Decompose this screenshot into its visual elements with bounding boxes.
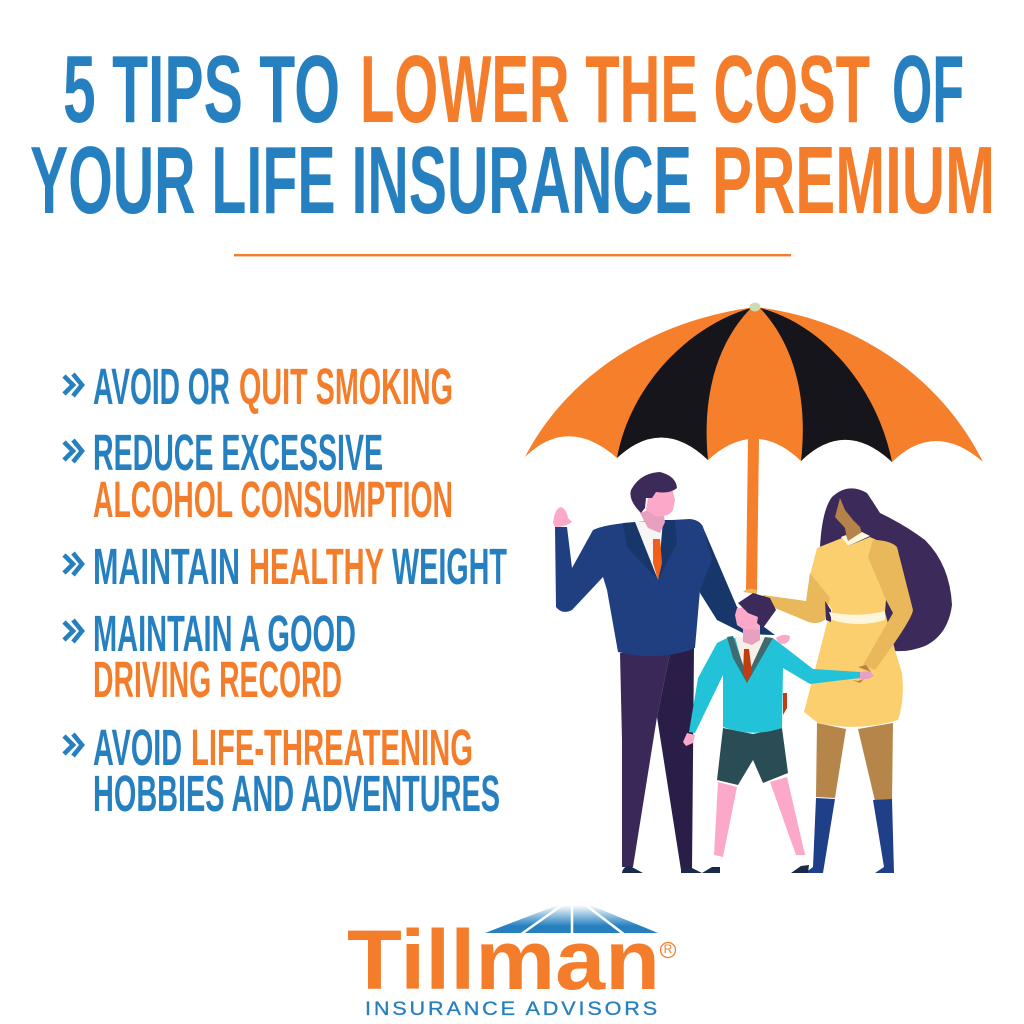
illustration: family under umbrella (525, 302, 983, 873)
man (553, 472, 775, 873)
tip 1 (64, 358, 453, 415)
tip 5 (64, 719, 500, 822)
title (30, 36, 995, 234)
tip 4: MAINTAIN A GOOD (93, 605, 356, 662)
logo roof (485, 905, 658, 933)
registered mark: R (664, 942, 673, 956)
logo wordmark: Tillman (347, 913, 660, 1007)
tips list (64, 358, 507, 822)
tip 1: QUIT SMOKING (239, 358, 453, 415)
woman (743, 488, 952, 873)
title: OF (892, 36, 964, 143)
child (683, 593, 874, 873)
tip 3 (64, 538, 507, 595)
logo (347, 903, 676, 1020)
tip 2 (64, 424, 453, 528)
tip 5: HOBBIES AND ADVENTURES (93, 765, 500, 822)
title: 5 TIPS TO (63, 36, 340, 143)
tip 4 (64, 605, 356, 708)
umbrella (525, 302, 983, 590)
logo tagline: INSURANCE ADVISORS (365, 999, 660, 1020)
tip 3: WEIGHT (392, 538, 507, 595)
tip 5: LIFE-THREATENING (191, 719, 473, 776)
tip 2: ALCOHOL CONSUMPTION (93, 471, 453, 528)
tip 4: DRIVING RECORD (93, 651, 342, 708)
tip 5: AVOID (93, 719, 182, 776)
tip 3: HEALTHY (249, 538, 384, 595)
tip 1: AVOID OR (93, 358, 230, 415)
tip 2: REDUCE EXCESSIVE (93, 424, 383, 481)
tip 3: MAINTAIN (93, 538, 240, 595)
